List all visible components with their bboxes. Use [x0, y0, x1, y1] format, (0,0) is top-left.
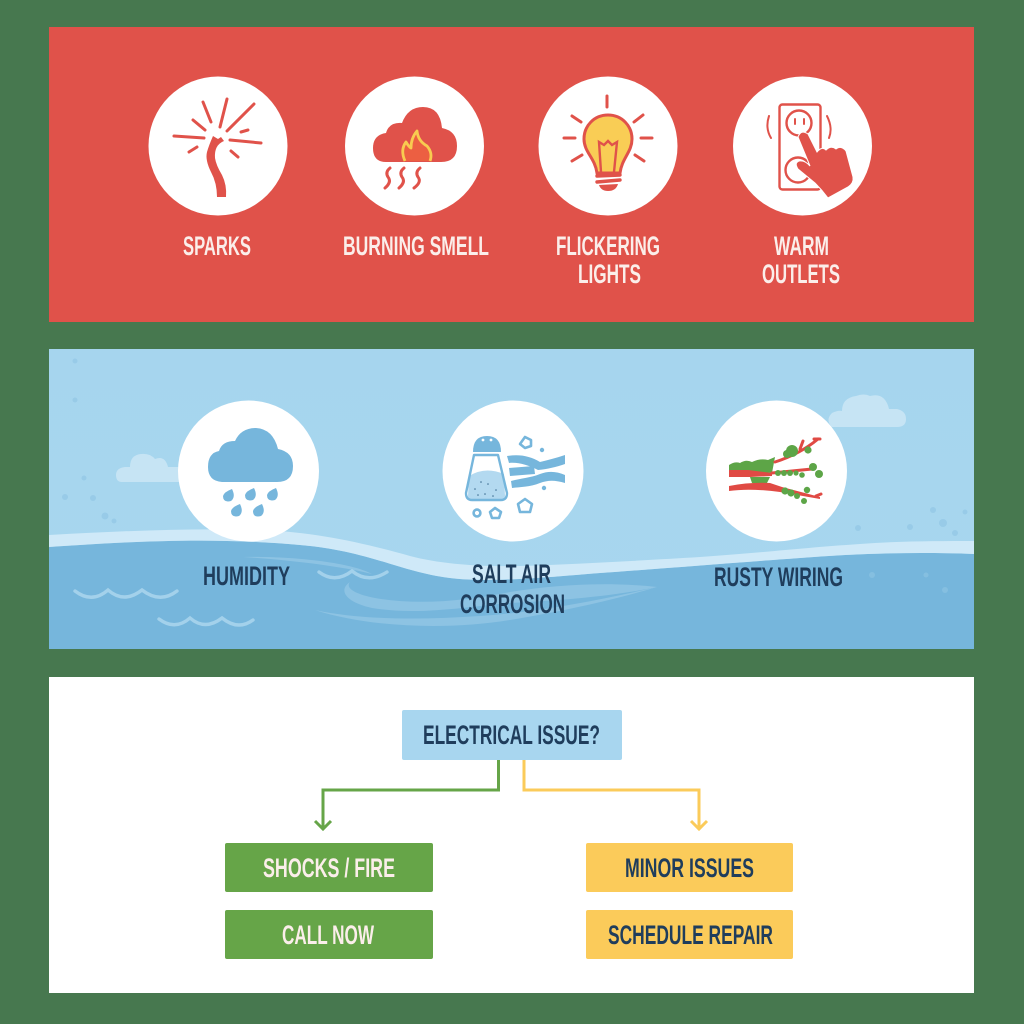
sea [49, 541, 974, 649]
sea foam band [49, 529, 974, 580]
icon: rusty wiring [706, 400, 847, 542]
label: burning smell: BURNING SMELL [343, 231, 489, 261]
icon: salt air [442, 400, 584, 542]
label: warm outlets: WARM [774, 231, 829, 261]
box: call now [225, 910, 433, 959]
panel: decision flowchart [49, 677, 974, 993]
label: flickering lights [556, 231, 660, 289]
panel: coastal causes [49, 349, 974, 649]
box: schedule repair: SCHEDULE REPAIR [608, 920, 773, 950]
box: minor issues: MINOR ISSUES [625, 853, 754, 883]
box: shocks or fire: SHOCKS / FIRE [263, 853, 395, 883]
label: salt air corrosion [460, 564, 564, 614]
panel: warning signs [49, 27, 974, 322]
label: sparks: SPARKS [183, 231, 251, 261]
arrow: green branch [315, 760, 498, 829]
box: call now: CALL NOW [282, 920, 374, 950]
box: minor issues [586, 843, 793, 892]
label: flickering lights: FLICKERING [556, 231, 660, 261]
cloud: right background [828, 394, 906, 427]
label: salt air corrosion: CORROSION [460, 589, 565, 619]
icon: flickering bulb [538, 76, 678, 216]
box: electrical issue [402, 710, 622, 760]
label: flickering lights: LIGHTS [578, 259, 641, 289]
box: shocks or fire [225, 843, 433, 892]
label: humidity: HUMIDITY [203, 561, 290, 591]
arrow: yellow branch [524, 760, 707, 829]
icon: humidity [178, 400, 319, 542]
icon: warm outlet [733, 76, 872, 216]
icon: sparks [148, 76, 288, 216]
sea swirl [243, 557, 657, 626]
icon: burning smell [345, 76, 484, 216]
label: rusty wiring: RUSTY WIRING [714, 562, 843, 592]
speckles [62, 358, 968, 593]
waves [75, 571, 387, 625]
cloud: left background [116, 454, 180, 482]
label: warm outlets [762, 231, 840, 289]
box: schedule repair [586, 910, 793, 959]
box: electrical issue: ELECTRICAL ISSUE? [423, 720, 600, 750]
label: salt air corrosion: SALT AIR [472, 559, 551, 589]
label: warm outlets: OUTLETS [762, 259, 840, 289]
